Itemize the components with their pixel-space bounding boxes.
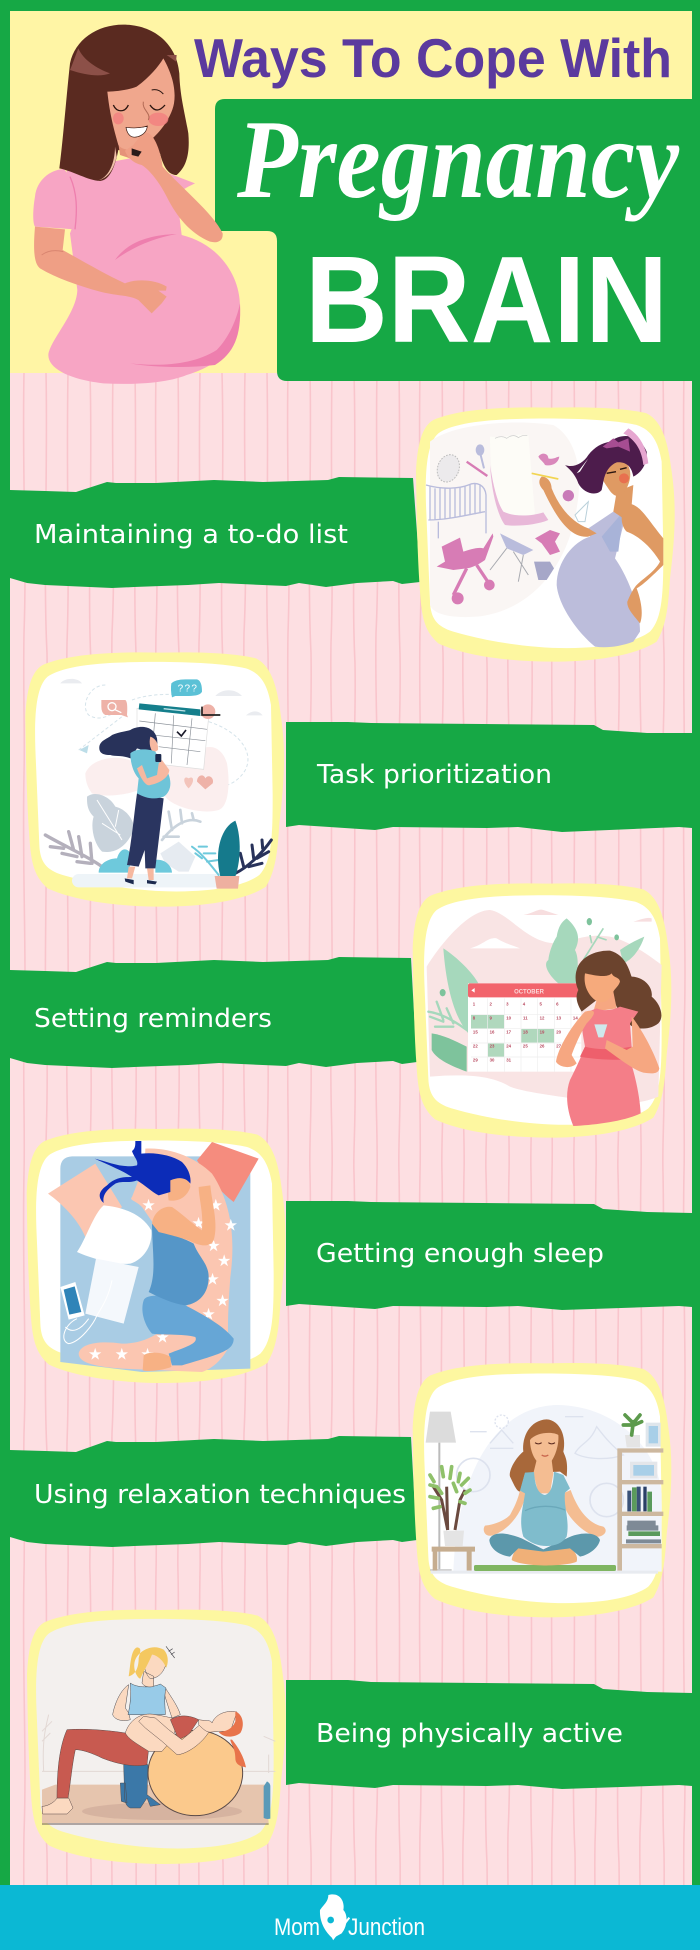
calendar: 11 bbox=[523, 1015, 528, 1020]
woman: face bbox=[601, 459, 630, 496]
crib bbox=[426, 483, 486, 538]
woman: arm and phone bbox=[137, 760, 169, 785]
salmon pillow bbox=[197, 1142, 259, 1202]
calendar: 9 bbox=[489, 1015, 492, 1020]
stars: ★ bbox=[201, 1306, 216, 1323]
tablet bbox=[85, 1259, 139, 1324]
calendar: 6 bbox=[556, 1001, 559, 1006]
calendar: 1 bbox=[473, 1001, 476, 1006]
green title box bbox=[215, 99, 692, 381]
stars: ★ bbox=[205, 1271, 220, 1288]
yellow frame bbox=[27, 1610, 286, 1864]
calendar: 13 bbox=[556, 1015, 562, 1020]
pale circle backdrop bbox=[453, 1405, 662, 1572]
bushes bbox=[99, 849, 172, 873]
band: Getting enough sleep bbox=[286, 1201, 700, 1310]
top plant bbox=[623, 1415, 642, 1447]
woman: headband and bow bbox=[623, 428, 648, 465]
woman: pencil bbox=[532, 473, 558, 479]
calendar: 29 bbox=[473, 1058, 478, 1063]
label: Task prioritization bbox=[316, 760, 552, 790]
woman: neck bbox=[533, 1460, 553, 1493]
calendar: 10 bbox=[506, 1015, 512, 1020]
duck bbox=[538, 454, 559, 465]
pregnant woman: belly bbox=[125, 1714, 179, 1751]
hair bbox=[59, 25, 189, 181]
woman: pants bbox=[127, 793, 164, 868]
calendar: 26 bbox=[540, 1044, 545, 1049]
title line 1: Ways To Cope With bbox=[194, 27, 672, 89]
interior bbox=[36, 1619, 274, 1848]
woman: hair bbox=[99, 727, 157, 758]
pregnant woman: face bbox=[199, 1711, 237, 1732]
woman: arms bbox=[484, 1490, 606, 1537]
woman: hair bbox=[565, 436, 647, 493]
band: Maintaining a to-do list bbox=[0, 477, 420, 588]
question bubble: ??? bbox=[178, 683, 197, 694]
pale backdrop bbox=[430, 422, 579, 617]
calendar: 18 bbox=[523, 1030, 528, 1035]
logo wordmark left: Mom bbox=[274, 1914, 320, 1941]
stars: ★ bbox=[115, 1346, 129, 1363]
blush backdrop bbox=[85, 747, 229, 811]
woman: face bbox=[585, 973, 620, 1002]
pregnant woman: top bbox=[170, 1716, 199, 1740]
woman: top bbox=[520, 1472, 570, 1546]
calendar: 8 bbox=[473, 1015, 476, 1020]
pale blob bbox=[160, 842, 195, 872]
band: Task prioritization bbox=[286, 722, 700, 832]
ball bbox=[148, 1730, 243, 1816]
white interior bbox=[424, 1374, 662, 1603]
pregnant woman: hair bbox=[219, 1711, 246, 1767]
woman: raised arm bbox=[539, 477, 597, 537]
woman: dress bbox=[557, 503, 640, 647]
toy bbox=[563, 490, 574, 501]
stars: ★ bbox=[88, 1346, 102, 1363]
label: Being physically active bbox=[316, 1719, 623, 1749]
calendar: 22 bbox=[473, 1044, 478, 1049]
teal leaf bbox=[218, 821, 240, 877]
woman: top bbox=[149, 1224, 209, 1305]
yellow frame bbox=[413, 1363, 671, 1617]
yellow frame bbox=[25, 652, 284, 907]
calendar bbox=[468, 983, 581, 1072]
woman: face bbox=[168, 1172, 190, 1201]
label: Setting reminders bbox=[34, 1004, 272, 1034]
white interior bbox=[426, 419, 663, 648]
bottle bbox=[264, 1781, 270, 1819]
label: Maintaining a to-do list bbox=[34, 520, 348, 550]
wall frame bbox=[646, 1423, 661, 1447]
tension marks bbox=[166, 1646, 175, 1658]
white interior bbox=[424, 895, 662, 1125]
calendar: 23 bbox=[490, 1044, 495, 1049]
yellow frame bbox=[413, 883, 671, 1138]
stars: ★ bbox=[140, 1346, 155, 1363]
clouds bbox=[60, 679, 263, 715]
band: Setting reminders bbox=[0, 957, 417, 1068]
woman: neck bbox=[613, 485, 633, 518]
stars: ★ bbox=[155, 1330, 170, 1347]
bib bbox=[434, 452, 463, 485]
woman: other arm bbox=[622, 503, 663, 623]
tree bbox=[430, 1467, 470, 1546]
card 4: sleep illustration bbox=[27, 1129, 285, 1383]
yellow frame bbox=[416, 407, 675, 662]
bottle bbox=[575, 502, 588, 522]
plant pot bbox=[215, 876, 239, 889]
woman: face bbox=[530, 1433, 558, 1467]
stars: ★ bbox=[141, 1197, 156, 1214]
neck bbox=[118, 143, 153, 160]
calendar: 31 bbox=[506, 1058, 512, 1063]
calendar bbox=[137, 703, 220, 769]
cream header background bbox=[10, 11, 692, 373]
woman: neck bbox=[593, 992, 617, 1012]
face bbox=[107, 58, 175, 150]
calendar: 12 bbox=[540, 1015, 545, 1020]
calendar: 3 bbox=[506, 1001, 509, 1006]
pink striped background panel bbox=[10, 373, 692, 1885]
raised arm and hand bbox=[125, 133, 223, 242]
dashed connectors bbox=[79, 685, 248, 786]
ground bbox=[72, 874, 222, 887]
calendar: 14 bbox=[573, 1015, 578, 1020]
body pillow bbox=[79, 1148, 232, 1372]
card 5: relaxation illustration bbox=[413, 1363, 671, 1617]
card 1: to-do list illustration bbox=[416, 407, 675, 662]
calendar: 27 bbox=[556, 1044, 562, 1049]
left sprig bbox=[45, 832, 102, 867]
woman: hair bbox=[510, 1419, 567, 1492]
band: Being physically active bbox=[286, 1680, 700, 1789]
arrow bbox=[79, 745, 89, 753]
logo icon bbox=[320, 1894, 349, 1938]
wall chart bbox=[490, 435, 548, 526]
woman: shirt bbox=[130, 749, 170, 798]
stars: ★ bbox=[224, 1217, 238, 1234]
pregnant woman: legs bbox=[57, 1729, 149, 1798]
calendar: 30 bbox=[490, 1058, 495, 1063]
cup bbox=[534, 562, 554, 580]
woman: foot bbox=[143, 1353, 171, 1371]
white pillow bbox=[77, 1205, 151, 1264]
stars: ★ bbox=[217, 1253, 231, 1270]
hearts bbox=[184, 777, 193, 788]
stars bbox=[88, 1197, 238, 1363]
phone bbox=[60, 1282, 85, 1320]
faint icons bbox=[470, 1417, 623, 1459]
woman: hair bbox=[576, 951, 661, 1029]
sleeve bbox=[33, 169, 77, 229]
woman: glass bbox=[594, 1024, 607, 1037]
cable bbox=[64, 1280, 112, 1344]
side table bbox=[432, 1547, 475, 1571]
woman: hair bbox=[95, 1141, 191, 1203]
baby seat bbox=[490, 533, 533, 582]
card 2: task prioritization illustration bbox=[25, 652, 284, 907]
calendar: 5 bbox=[539, 1001, 542, 1006]
belly shadow bbox=[130, 303, 240, 367]
calendar: 24 bbox=[506, 1044, 512, 1049]
yoga mat bbox=[474, 1565, 616, 1571]
trainer: pants bbox=[120, 1765, 160, 1808]
calendar: 15 bbox=[473, 1030, 478, 1035]
label: Getting enough sleep bbox=[316, 1239, 604, 1269]
navy sprig bbox=[235, 840, 271, 873]
leaves bbox=[428, 918, 644, 1072]
pink hills bbox=[427, 910, 662, 1104]
onesie bbox=[535, 530, 560, 555]
card 3: setting reminders illustration bbox=[413, 883, 671, 1138]
stars: ★ bbox=[206, 1238, 221, 1255]
logo wordmark right: Junction bbox=[348, 1914, 425, 1941]
trainer: hair bbox=[129, 1647, 168, 1679]
peach pillow bbox=[48, 1164, 122, 1237]
question bubble bbox=[171, 679, 202, 697]
dress bbox=[48, 158, 240, 384]
band: Using relaxation techniques bbox=[0, 1436, 417, 1547]
header panel bbox=[10, 11, 692, 381]
calendar: 19 bbox=[540, 1030, 545, 1035]
stars: ★ bbox=[215, 1293, 230, 1310]
calendar: 4 bbox=[523, 1001, 526, 1006]
illustration: pregnant woman, hand at mouth bbox=[33, 25, 240, 384]
calendar: 20 bbox=[556, 1030, 562, 1035]
mid sprig bbox=[162, 810, 200, 840]
footer bar bbox=[0, 1885, 700, 1950]
floor bbox=[431, 1571, 658, 1574]
label: Using relaxation techniques bbox=[34, 1480, 406, 1510]
stars: ★ bbox=[209, 1197, 223, 1214]
gray leaf bbox=[87, 794, 134, 852]
lower arm and hand on belly bbox=[34, 227, 167, 313]
yellow frame bbox=[27, 1129, 285, 1383]
trainer: face bbox=[142, 1650, 167, 1687]
clouds bbox=[470, 938, 520, 948]
calendar: 16 bbox=[490, 1030, 495, 1035]
title line 3: BRAIN bbox=[305, 232, 668, 369]
shelf bbox=[617, 1448, 663, 1571]
woman: legs bbox=[142, 1296, 234, 1365]
spoon and fork bbox=[467, 444, 487, 476]
teal sprig bbox=[192, 847, 219, 875]
eyes, nose and brow bbox=[113, 90, 165, 120]
stars: ★ bbox=[191, 1216, 206, 1233]
pregnant woman: arm bbox=[139, 1716, 210, 1755]
pregnant woman: foot bbox=[42, 1798, 73, 1814]
stroller bbox=[437, 533, 495, 604]
woman: face bbox=[150, 737, 158, 753]
white interior bbox=[35, 662, 273, 891]
woman: feet bbox=[512, 1545, 577, 1565]
white interior bbox=[36, 1141, 274, 1370]
calendar: OCTOBER bbox=[514, 989, 545, 995]
trainer: top bbox=[128, 1683, 166, 1715]
trainer: arms bbox=[113, 1685, 180, 1721]
woman: legs and shoes bbox=[127, 867, 154, 880]
woman: legs bbox=[489, 1534, 600, 1557]
smile bbox=[126, 126, 147, 137]
lamp bbox=[426, 1412, 456, 1571]
woman: arm bbox=[152, 1185, 215, 1245]
calendar: 2 bbox=[489, 1001, 492, 1006]
calendar: 25 bbox=[523, 1044, 528, 1049]
woman: arms bbox=[556, 1011, 659, 1073]
faint plants and wall line bbox=[42, 1715, 275, 1773]
search bubble bbox=[101, 700, 128, 717]
card 6: physical activity illustration bbox=[27, 1610, 286, 1864]
woman: belt bbox=[580, 1047, 632, 1060]
calendar: 17 bbox=[506, 1030, 512, 1035]
cheeks bbox=[113, 112, 168, 126]
mat bbox=[42, 1785, 269, 1823]
woman: dress bbox=[567, 1007, 641, 1126]
blue mattress bbox=[60, 1156, 250, 1372]
